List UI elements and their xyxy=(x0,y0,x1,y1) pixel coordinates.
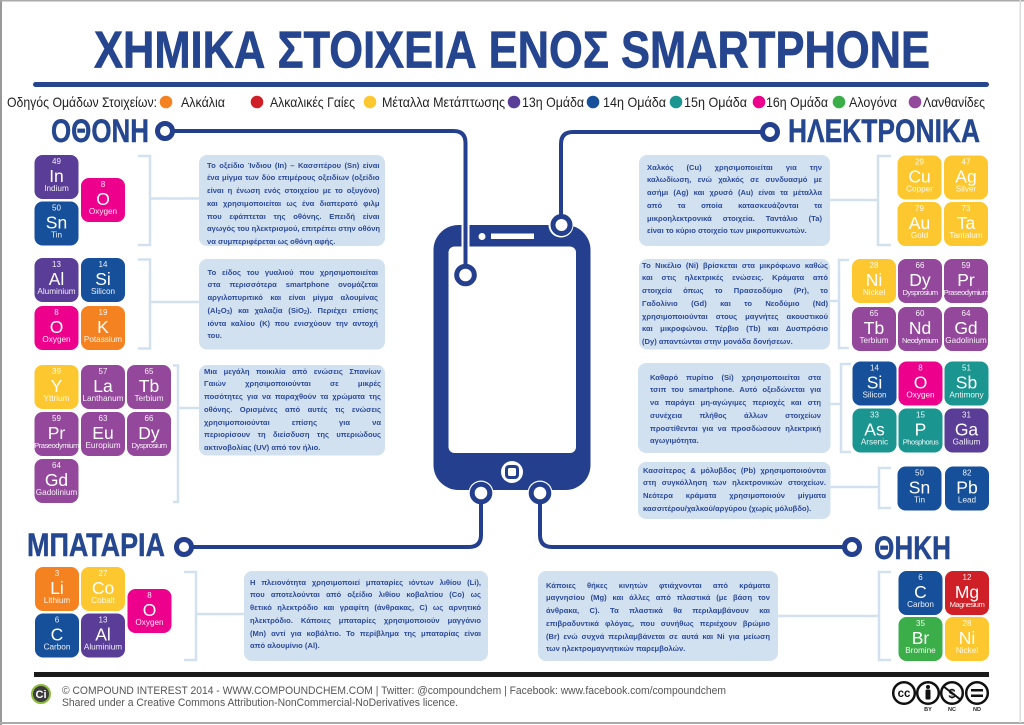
text block: nickel and rare earth magnets: και μικροφώνου. Τέρβιο (Tb) και Δυσπρόσιο xyxy=(642,324,828,333)
icon: creative commons licence: BY xyxy=(924,707,932,713)
footer credits: Shared under a Creative Commons Attribution-NonCommercial-NoDerivatives licence. xyxy=(62,697,458,709)
tile: praseodymium: 59 xyxy=(962,261,971,270)
text block: copper, silver, gold, tantalum xyxy=(647,162,822,242)
tile: dysprosium xyxy=(898,259,942,303)
text block: aluminosilicate glass: αργιλοπυριτικό και είναι μίγμα αλουμίνας xyxy=(208,293,378,302)
tile: oxygen xyxy=(34,306,78,350)
tile: aluminium: Aluminium xyxy=(37,287,76,296)
tile: copper: Copper xyxy=(906,184,933,194)
panel: screen, transparent conductor xyxy=(34,155,385,250)
tile: praseodymium xyxy=(944,259,988,303)
icon: creative commons licence xyxy=(893,682,988,713)
tile: silicon: Silicon xyxy=(862,390,887,400)
text block: nickel and rare earth magnets xyxy=(642,260,828,352)
panel: screen, glass xyxy=(34,258,385,350)
text block: indium tin oxide: που εφάπτεται της οθόνης. Επειδή είναι xyxy=(207,212,380,220)
text block: lithium ion battery: που αποτελούνται από οξείδιο λιθίου κοβαλτίου (Co) ως xyxy=(250,590,481,599)
tile: silicon: Si xyxy=(867,372,882,392)
text block: indium tin oxide xyxy=(207,160,380,250)
text block: silicon chip doping: τσιπ του smartphone. Αυτό οξειδώνεται για xyxy=(650,385,821,394)
tile: europium xyxy=(81,412,125,456)
text block: tin and lead solder: στη συγκόλληση των ηλεκτρονικών στοιχείων. xyxy=(643,478,826,487)
tile: praseodymium xyxy=(34,412,79,456)
text block: rare earth compounds: Μια μεγάλη ποικιλία από ενώσεις Σπανίων xyxy=(204,366,381,376)
text block: case materials: Κάποιες θήκες κινητών φτιάχνονται από κράματα xyxy=(546,580,770,590)
tile: tin: Sn xyxy=(46,212,67,232)
tile: oxygen xyxy=(128,589,172,633)
tile: tantalum: 73 xyxy=(962,204,971,213)
text block: rare earth compounds: περιορίσουν τη διείσδυση της υπεριώδους xyxy=(204,430,381,439)
text block: silicon chip doping xyxy=(650,372,821,452)
tile: yttrium: Y xyxy=(51,376,63,396)
tile: tantalum: Tantalum xyxy=(949,231,983,240)
tile: gadolinium xyxy=(34,459,78,503)
legend: element groups: 13η Ομάδα xyxy=(522,94,584,110)
tile: gadolinium: Gadolinium xyxy=(36,488,77,497)
tile: gold: 79 xyxy=(915,204,924,213)
tile: tin: Tin xyxy=(51,230,62,240)
tile: tantalum xyxy=(944,202,988,246)
tile: neodymium xyxy=(898,307,942,351)
tile: neodymium: Neodymium xyxy=(902,336,938,345)
tile: oxygen: Oxygen xyxy=(906,390,935,400)
text block: case materials: (Br) ενώ συχνά περιλαμβάνεται σε αυτά και Ni για μείωση xyxy=(546,632,770,640)
tile: terbium xyxy=(127,365,171,409)
text block: copper, silver, gold, tantalum: από τα οποία κατασκευάζονται τα xyxy=(647,201,822,210)
text block: indium tin oxide: και χρησιμοποιείται ως ένα διαπερατό φιλμ xyxy=(207,199,380,208)
text block: nickel and rare earth magnets: και στις ηλεκτρικές ενώσεις. Κράματα από xyxy=(642,273,828,282)
text block: nickel and rare earth magnets: χρησιμοποιούνται στους μαγνήτες ακουστικού xyxy=(642,312,828,320)
tile: carbon: Carbon xyxy=(907,600,934,609)
tile: silver: 47 xyxy=(962,158,971,166)
tile: nickel: Nickel xyxy=(863,288,885,297)
text block: case materials: των ηλεκτρομαγνητικών παρεμβολών. xyxy=(546,644,685,653)
tile: magnesium: Mg xyxy=(955,582,979,602)
tile: gadolinium: 64 xyxy=(962,309,971,318)
tile: carbon xyxy=(898,571,942,615)
icon: smartphone xyxy=(434,225,590,490)
legend: element groups: 15η Ομάδα xyxy=(684,94,747,110)
tile: phosphorus: Phosphorus xyxy=(903,438,939,446)
tile: terbium: Tb xyxy=(864,318,884,338)
connector: battery xyxy=(176,480,494,554)
icon: compound interest logo: Ci xyxy=(36,689,46,701)
heading: electronics: ΗΛΕΚΤΡΟΝΙΚΑ xyxy=(788,113,980,149)
icon: compound interest logo xyxy=(32,685,50,703)
tile: oxygen: 8 xyxy=(54,308,59,317)
tile: terbium xyxy=(852,307,896,351)
text block: copper, silver, gold, tantalum: ασήμι (Ag) και χρυσό (Au) είναι τα μέταλλα xyxy=(647,188,822,197)
tile: lithium xyxy=(35,567,79,611)
tile: aluminium: Aluminium xyxy=(84,642,122,652)
tile: gadolinium xyxy=(944,307,988,351)
tile: carbon xyxy=(35,614,79,658)
tile: cobalt: Co xyxy=(92,578,114,598)
text block: silicon chip doping: να παράγει μη-αγώγιμες περιοχές και στη xyxy=(650,398,821,407)
text block: silicon chip doping: Καθαρό πυρίτιο (Si) χρησιμοποιείται στα xyxy=(650,372,821,382)
tile: arsenic: As xyxy=(864,420,885,440)
tile: praseodymium: Pr xyxy=(957,270,975,290)
tile: potassium: Potassium xyxy=(84,335,122,344)
tile: lithium: 3 xyxy=(55,569,60,578)
tile: oxygen xyxy=(898,362,942,406)
tile: indium: 49 xyxy=(52,157,61,166)
tile: europium: Eu xyxy=(92,423,114,443)
tile: oxygen: O xyxy=(914,372,927,392)
heading: case: ΘΗΚΗ xyxy=(874,530,951,566)
tile: gallium: Ga xyxy=(955,420,978,440)
text block: nickel and rare earth magnets: Το Νικέλιο (Ni) βρίσκεται στα μικρόφωνο καθώς xyxy=(642,260,828,270)
legend: element groups: 14η Ομάδα xyxy=(603,94,666,110)
tile: dysprosium: 66 xyxy=(916,261,925,270)
legend: element groups: 16η Ομάδα xyxy=(766,94,828,110)
tile: oxygen: 8 xyxy=(147,591,152,600)
tile: gallium: 31 xyxy=(962,410,971,420)
tile: magnesium: 12 xyxy=(963,573,972,582)
icon: creative commons licence: $ xyxy=(948,686,956,701)
tile: yttrium: Yttrium xyxy=(44,394,70,403)
tile: oxygen: 8 xyxy=(918,364,923,372)
icon: creative commons licence: ND xyxy=(973,707,981,713)
icon: creative commons licence: cc xyxy=(898,688,911,700)
tile: dysprosium: Dysprosium xyxy=(902,288,938,297)
tile: silicon: Silicon xyxy=(91,287,116,296)
tile: bromine: Br xyxy=(912,628,929,648)
tile: gallium xyxy=(944,408,988,452)
tile: lead: Pb xyxy=(956,478,978,498)
tile: copper: Cu xyxy=(908,166,931,186)
legend: element groups: Μέταλλα Μετάπτωσης xyxy=(382,94,505,110)
tile: tin: Sn xyxy=(909,478,930,498)
connector: electronics xyxy=(548,124,778,238)
tile: silicon: 14 xyxy=(870,364,879,372)
text block: aluminosilicate glass: στα περισσότερα smartphone ονομάζεται xyxy=(208,280,378,289)
text block: silicon chip doping: προστίθενται για να προσδώσουν ηλεκτρική xyxy=(650,424,821,432)
tile: tin xyxy=(34,202,78,246)
tile: lead: Lead xyxy=(958,496,977,504)
tile: praseodymium: Praseodymium xyxy=(944,288,988,297)
text block: rare earth compounds: χρησιμοποιούνται επίσης για να xyxy=(204,418,381,426)
tile: antimony: 51 xyxy=(962,364,971,372)
tile: dysprosium: Dy xyxy=(909,270,931,290)
text block: nickel and rare earth magnets: Γαδολίνιο (Gd) και το Νεοδύμιο (Nd) xyxy=(642,299,828,308)
tile: praseodymium: Pr xyxy=(48,423,65,443)
text block: nickel and rare earth magnets: (Dy) απαντώνται στην μονάδα δονήσεων. xyxy=(642,337,793,346)
text block: case materials: άνθρακα, C). Τα πλαστικά θα περιλαμβάνουν και xyxy=(546,606,770,615)
tile: tantalum: Ta xyxy=(957,213,976,233)
tile: indium xyxy=(34,155,78,199)
text block: copper, silver, gold, tantalum: μικροηλεκτρονικά στοιχεία. Ταντάλιο (Ta) xyxy=(647,214,822,222)
tile: arsenic xyxy=(852,408,896,452)
tile: lanthanum: La xyxy=(93,376,113,396)
tile: nickel: Ni xyxy=(866,270,882,290)
tile: antimony: Sb xyxy=(956,372,977,392)
tile: terbium: Tb xyxy=(139,376,159,396)
tile: neodymium: Nd xyxy=(909,318,931,338)
icon: creative commons licence: NC xyxy=(948,707,956,713)
tile: phosphorus: 15 xyxy=(916,410,925,420)
text block: case materials: μαγνησίου (Mg) και άλλες από πλαστικά (με βάση τον xyxy=(546,593,770,602)
tile: silicon xyxy=(81,258,125,302)
tile: bromine: 35 xyxy=(916,619,925,628)
tile: cobalt: Cobalt xyxy=(91,596,116,605)
footer credits: © COMPOUND INTEREST 2014 - WWW.COMPOUNDCHEM.COM | Twitter: @compoundchem | Facebook: www.facebook.com/compoundchem xyxy=(62,685,726,697)
tile: potassium: 19 xyxy=(99,308,108,317)
text block: rare earth compounds: οθόνης. Ορισμένες από αυτές τις ενώσεις xyxy=(204,405,381,414)
legend: element groups: Αλκάλια xyxy=(181,94,225,110)
tile: indium: Indium xyxy=(44,184,69,193)
tile: oxygen: Oxygen xyxy=(135,618,164,627)
legend: element groups: Οδηγός Ομάδων Στοιχείων: xyxy=(7,94,157,110)
tile: oxygen: O xyxy=(143,600,156,620)
tile: aluminium: Al xyxy=(49,269,64,289)
panel: case xyxy=(538,571,989,661)
tile: carbon: C xyxy=(914,582,927,602)
tile: oxygen: Oxygen xyxy=(42,335,71,344)
text block: rare earth compounds: Γαιών χρησιμοποιούνται σε μικρές xyxy=(204,379,381,388)
tile: gold: Au xyxy=(909,213,930,233)
tile: praseodymium: 59 xyxy=(52,414,61,423)
tile: oxygen: Oxygen xyxy=(89,207,118,216)
text block: lithium ion battery: από αλουμίνιο (Al). xyxy=(250,641,320,650)
text block: case materials xyxy=(546,580,770,660)
tile: dysprosium: Dysprosium xyxy=(131,441,167,450)
tile: dysprosium: Dy xyxy=(138,423,160,443)
legend: element groups: Αλκαλικές Γαίες xyxy=(270,94,355,110)
text block: silicon chip doping: συνέχεια πλήθος άλλων στοιχείων xyxy=(650,411,821,420)
tile: nickel: Nickel xyxy=(956,646,978,655)
tile: antimony: Antimony xyxy=(949,390,984,400)
tile: lithium: Lithium xyxy=(44,596,70,605)
tile: carbon: 6 xyxy=(55,616,60,624)
text block: copper, silver, gold, tantalum: Χαλκός (Cu) χρησιμοποιείται για την xyxy=(647,162,822,172)
tile: arsenic: Arsenic xyxy=(861,438,888,446)
tile: europium: 63 xyxy=(99,414,108,423)
tile: potassium: K xyxy=(97,317,109,337)
panel: electronics, solder xyxy=(638,462,989,519)
text block: case materials: επιβραδυντικά φλόγας, που συνήθως περιέχουν βρώμιο xyxy=(546,619,770,628)
tile: arsenic: 33 xyxy=(870,410,879,420)
panel: battery xyxy=(35,567,488,661)
text block: tin and lead solder: κασσιτέρου/χαλκού/αργύρου (χωρίς μόλυβδο). xyxy=(643,504,811,513)
tile: nickel xyxy=(852,259,896,303)
tile: gadolinium: 64 xyxy=(52,461,61,470)
panel: electronics, chip xyxy=(638,362,988,453)
tile: europium: Europium xyxy=(85,441,121,450)
tile: dysprosium xyxy=(127,412,171,456)
tile: magnesium xyxy=(945,571,989,615)
footer credits xyxy=(62,685,726,709)
text block: lithium ion battery: ηλεκτρόδιο. Κάποιες μπαταρίες χρησιμοποιούν μαγγάνιο xyxy=(250,616,481,625)
tile: silver: Silver xyxy=(956,184,977,194)
tile: bromine: Bromine xyxy=(905,646,936,655)
panel: electronics, wiring xyxy=(639,155,988,246)
tile: dysprosium: 66 xyxy=(145,414,154,423)
tile: gadolinium: Gd xyxy=(45,470,68,490)
text block: indium tin oxide: ένα μίγμα των δύο επιμέρους οξειδίων (οξείδιο xyxy=(207,173,380,182)
panel: electronics, microphone and speakers xyxy=(639,259,988,352)
legend: element groups: Λανθανίδες xyxy=(923,94,985,110)
tile: silicon xyxy=(852,362,896,406)
tile: gadolinium: Gd xyxy=(954,318,978,338)
text block: lithium ion battery: θετικό ηλεκτρόδιο και γραφίτη (άνθρακας, C) ως αρνητικό xyxy=(250,603,481,612)
tile: lanthanum xyxy=(81,365,125,409)
tile: carbon: Carbon xyxy=(44,642,71,652)
tile: lanthanum: Lanthanum xyxy=(83,394,124,403)
text block: silicon chip doping: αγωγιμότητα. xyxy=(650,436,699,445)
tile: yttrium: 39 xyxy=(52,367,61,376)
tile: praseodymium: Praseodymium xyxy=(34,441,79,450)
tile: silicon: 14 xyxy=(99,260,108,269)
text block: aluminosilicate glass: του. xyxy=(208,331,222,340)
tile: aluminium xyxy=(34,258,78,302)
tile: phosphorus xyxy=(898,408,942,452)
tile: aluminium xyxy=(81,614,125,658)
tile: carbon: 6 xyxy=(918,573,923,582)
tile: indium: In xyxy=(49,166,64,186)
text block: rare earth compounds xyxy=(204,366,381,458)
legend: element groups xyxy=(7,94,985,110)
text block: rare earth compounds: ποσότητες για να παραχθούν τα χρώματα της xyxy=(204,392,381,401)
text block: indium tin oxide: είναι η ένωση ενός στοιχείου με το οξυγόνο) xyxy=(207,186,380,195)
tile: tin: 50 xyxy=(915,468,924,478)
tile: gadolinium: Gadolinium xyxy=(945,336,987,345)
tile: copper: 29 xyxy=(915,158,924,166)
tile: aluminium: 13 xyxy=(52,260,61,269)
tile: bromine xyxy=(898,617,942,661)
tile: cobalt xyxy=(81,567,125,611)
tile: terbium: Terbium xyxy=(859,336,889,345)
text block: aluminosilicate glass: ιόντα καλίου (K) που ενισχύουν την αντοχή xyxy=(208,318,378,328)
tile: oxygen xyxy=(81,178,125,222)
text block: tin and lead solder: Νεότερα κράματα χρησιμοποιούν μίγματα xyxy=(643,491,826,500)
tile: silicon: Si xyxy=(95,269,111,289)
text block: lithium ion battery: (Mn) αντί για κοβάλτιο. Το περίβλημα της μπαταρίας είναι xyxy=(250,628,481,638)
text block: copper, silver, gold, tantalum: καλωδίωση, ενώ χαλκός σε συνδυασμό με xyxy=(647,175,822,184)
tile: antimony xyxy=(944,362,988,406)
tile: terbium: 65 xyxy=(145,367,154,376)
tile: aluminium: Al xyxy=(95,624,111,644)
text block: indium tin oxide: Το οξείδιο Ίνδιου (In) – Κασσιτέρου (Sn) είναι xyxy=(207,160,380,170)
text block: aluminosilicate glass: (Al2O3) και χαλαζία (SiO2). Περιέχει επίσης xyxy=(208,306,378,316)
tile: silver: Ag xyxy=(955,166,977,186)
connector: screen xyxy=(158,124,474,284)
tile: cobalt: 27 xyxy=(99,569,108,578)
legend: element groups: Αλογόνα xyxy=(849,94,897,110)
tile: oxygen: O xyxy=(50,317,63,337)
tile: gold xyxy=(898,202,942,246)
tile: nickel xyxy=(945,617,989,661)
tile: magnesium: Magnesium xyxy=(950,600,985,609)
panel: screen, rare earths xyxy=(34,365,385,503)
tile: terbium: Terbium xyxy=(134,394,164,403)
tile: lead xyxy=(945,466,989,510)
tile: copper xyxy=(898,156,942,200)
tile: gallium: Gallium xyxy=(953,438,981,446)
tile: lead: 82 xyxy=(963,468,972,478)
tile: nickel: 28 xyxy=(870,261,879,270)
tile: gold: Gold xyxy=(911,231,929,240)
tile: silver xyxy=(944,156,988,200)
text block: indium tin oxide: να συμπεριφέρεται ως οθόνη αφής. xyxy=(207,237,335,246)
tile: phosphorus: P xyxy=(915,420,926,440)
text block: copper, silver, gold, tantalum: είναι το κύριο στοιχείο των μικροπυκνωτών. xyxy=(647,226,807,235)
tile: neodymium: 60 xyxy=(916,309,925,318)
tile: oxygen: 8 xyxy=(101,180,106,189)
text block: nickel and rare earth magnets: στοιχεία όπως το Πρασεοδύμιο (Pr), το xyxy=(642,286,828,295)
tile: nickel: Ni xyxy=(959,628,975,648)
text block: lithium ion battery xyxy=(250,576,481,656)
tile: tin: 50 xyxy=(52,204,61,212)
heading: screen: ΟΘΟΝΗ xyxy=(51,113,149,149)
tile: nickel: 28 xyxy=(963,619,972,628)
tile: yttrium xyxy=(34,365,78,409)
connector: case xyxy=(528,480,860,554)
heading: battery: ΜΠΑΤΑΡΙΑ xyxy=(27,527,165,563)
text block: tin and lead solder: Κασσίτερος & μόλυβδος (Pb) χρησιμοποιούνται xyxy=(643,466,826,474)
text block: aluminosilicate glass xyxy=(208,266,378,346)
text block: indium tin oxide: αγωγός του ηλεκτρισμού, επιτρέπει στην οθόνη xyxy=(207,224,380,233)
tile: terbium: 65 xyxy=(870,309,879,318)
tile: tin: Tin xyxy=(914,496,925,504)
tile: aluminium: 13 xyxy=(99,616,108,624)
text block: rare earth compounds: ακτινοβολίας (UV) από τον ήλιο. xyxy=(204,443,320,452)
text block: aluminosilicate glass: Το είδος του γυαλιού που χρησιμοποιείται xyxy=(208,268,378,276)
text block: lithium ion battery: Η πλειονότητα χρησιμοποιεί μπαταρίες ιόντων λιθίου (Li), xyxy=(250,578,481,586)
tile: potassium xyxy=(81,306,125,350)
text block: tin and lead solder xyxy=(643,464,826,518)
tile: oxygen: O xyxy=(96,189,110,209)
tile: lanthanum: 57 xyxy=(99,367,108,376)
tile: lithium: Li xyxy=(50,578,64,598)
tile: carbon: C xyxy=(51,624,63,644)
tile: tin xyxy=(898,466,942,510)
